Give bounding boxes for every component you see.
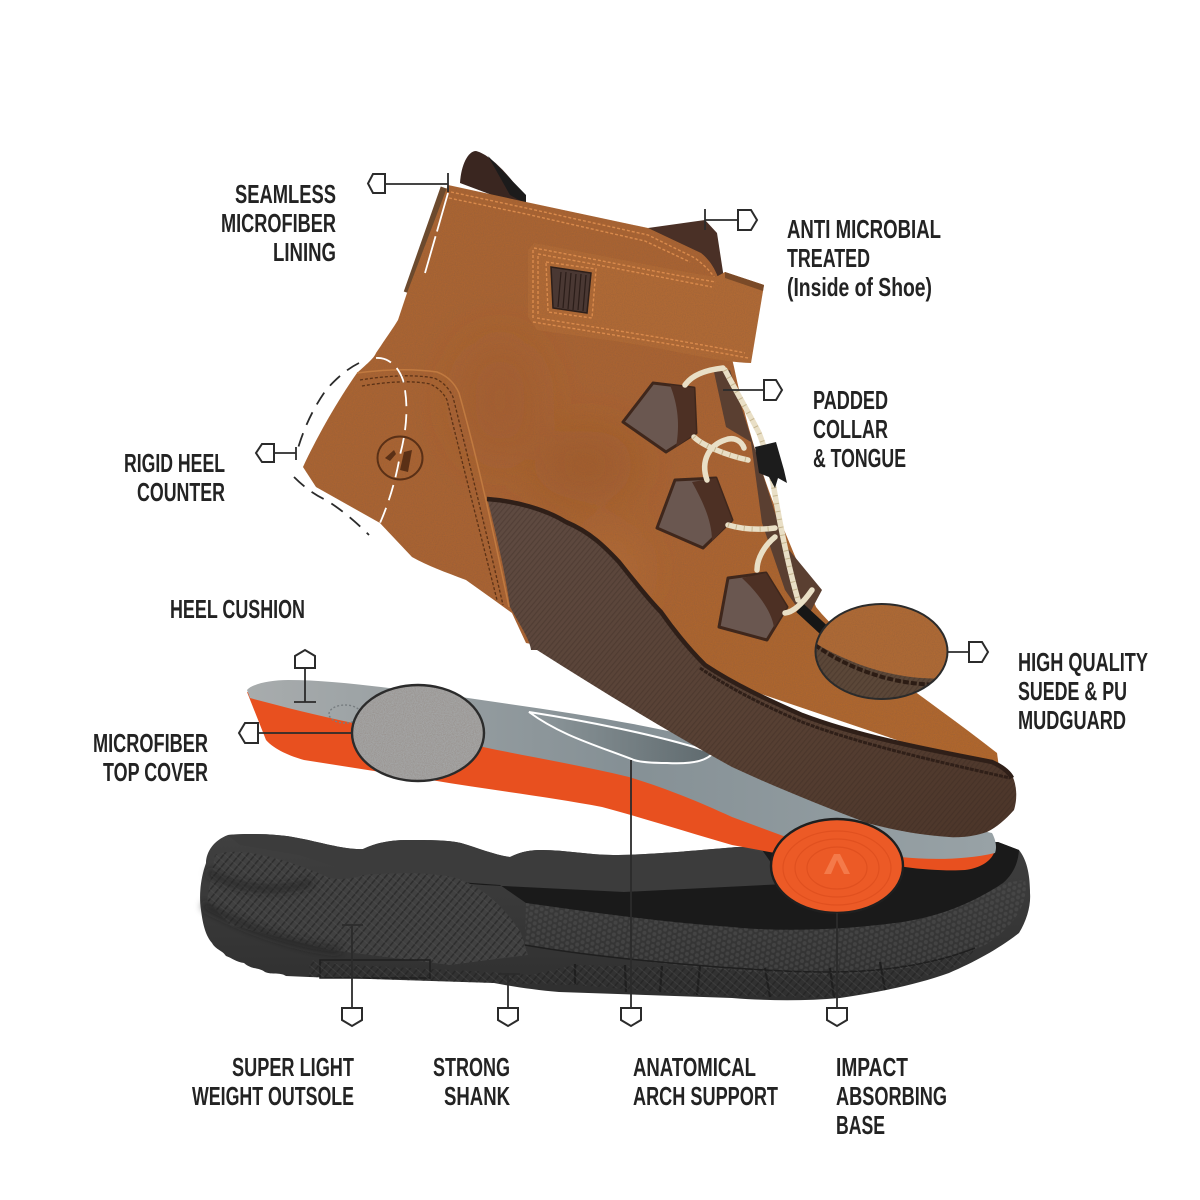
label: anti microbial treated [787,214,941,302]
label: anatomical arch support: ANATOMICAL [633,1052,756,1082]
boot: black cord end [800,608,826,632]
label: super light weight outsole [192,1052,354,1111]
outsole [200,834,1030,1000]
marker: outsole [342,925,363,1026]
label: seamless microfiber lining: MICROFIBER [221,208,336,238]
lens: microfiber top cover [352,685,484,781]
marker: microfiber top cover [239,723,352,743]
label: high quality suede and PU mudguard: MUDGUARD [1018,705,1126,735]
boot: suede shading [460,340,635,605]
label: padded collar and tongue: & TONGUE [813,443,906,473]
label: rigid heel counter: RIGID HEEL [124,448,225,478]
heel counter dashed outline [294,363,369,535]
boot [303,151,1016,837]
label: padded collar and tongue [813,385,906,473]
boot: white heel highlight dashes [376,358,406,523]
label: impact absorbing base: BASE [836,1110,885,1140]
boot: rear band [408,188,445,293]
insole: orange foam side [247,692,994,870]
boot: heel counter seam [357,370,509,607]
label: super light weight outsole: SUPER LIGHT [232,1052,354,1082]
label: strong shank: STRONG [433,1052,510,1082]
boot: eyelet tab top [623,383,696,452]
label: anatomical arch support [633,1052,778,1111]
boot: white lining dashes [425,193,448,273]
label: seamless microfiber lining [221,179,336,267]
outsole: tread lugs [320,945,975,998]
boot: tongue strip beside laces [714,370,822,620]
marker: padded collar [723,380,782,400]
label: high quality suede and PU mudguard [1018,647,1148,735]
marker: seamless microfiber lining [368,173,448,193]
insole: arch support outline [529,712,713,763]
label: anti microbial treated: ANTI MICROBIAL [787,214,941,244]
boot: lace toggle [755,442,787,488]
marker: suede and mudguard [947,642,988,662]
boot: suede upper [303,185,1000,775]
lens: brand mark [824,854,850,874]
marker: impact base [827,913,847,1026]
label: impact absorbing base: IMPACT [836,1052,908,1082]
outsole: molded heel section [207,852,528,965]
label: microfiber top cover: MICROFIBER [93,728,208,758]
boot: tongue pull [460,151,526,202]
insole [247,680,996,870]
marker: heel cushion [294,650,316,702]
insole: grey top cover [247,680,996,859]
label: microfiber top cover [93,728,208,787]
boot: eyelet tab bottom [719,573,787,640]
label: padded collar and tongue: PADDED [813,385,888,415]
boot: heel logo [378,436,422,480]
label: seamless microfiber lining: LINING [273,237,336,267]
label: seamless microfiber lining: SEAMLESS [235,179,336,209]
label: microfiber top cover: TOP COVER [103,757,208,787]
lens: suede and mudguard detail [810,604,950,705]
marker: arch support [621,760,641,1026]
label: strong shank [433,1052,510,1111]
label: super light weight outsole: WEIGHT OUTSOLE [192,1081,354,1111]
label: high quality suede and PU mudguard: HIGH QUALITY [1018,647,1148,677]
lens: impact absorbing base [771,819,903,913]
boot: mudguard stitched edge [487,499,1012,778]
outsole: heel shadow fold [203,872,340,950]
boot: velcro strap [528,243,764,363]
label: impact absorbing base [836,1052,947,1140]
label: rigid heel counter [124,448,225,507]
label: high quality suede and PU mudguard: SUEDE & PU [1018,676,1127,706]
marker: shank [498,974,520,1026]
boot: inner lining [648,220,725,285]
insole: heel detail [329,705,361,723]
outsole: inner footbed wall [228,834,800,892]
callout markers [239,173,988,1026]
label: anti microbial treated: (Inside of Shoe) [787,272,932,302]
marker: rigid heel counter [256,444,296,462]
label: strong shank: SHANK [444,1081,510,1111]
label: padded collar and tongue: COLLAR [813,414,888,444]
label: heel cushion: HEEL CUSHION [170,594,305,624]
label: anti microbial treated: TREATED [787,243,870,273]
boot: collar stitching [449,192,716,280]
outsole: rim texture [525,880,1026,975]
outsole: black cavity [363,842,1019,930]
label: impact absorbing base: ABSORBING [836,1081,947,1111]
boot: strap brand patch [546,262,596,318]
boot: mudguard [487,497,1016,837]
label: rigid heel counter: COUNTER [137,477,225,507]
label: anatomical arch support: ARCH SUPPORT [633,1081,778,1111]
boot: elastic laces [685,368,812,613]
outsole: front tread texture [575,950,975,998]
marker: anti microbial [705,209,757,230]
outsole: outer tread shell [200,834,1030,1000]
boot: eyelet tab middle [657,478,732,548]
